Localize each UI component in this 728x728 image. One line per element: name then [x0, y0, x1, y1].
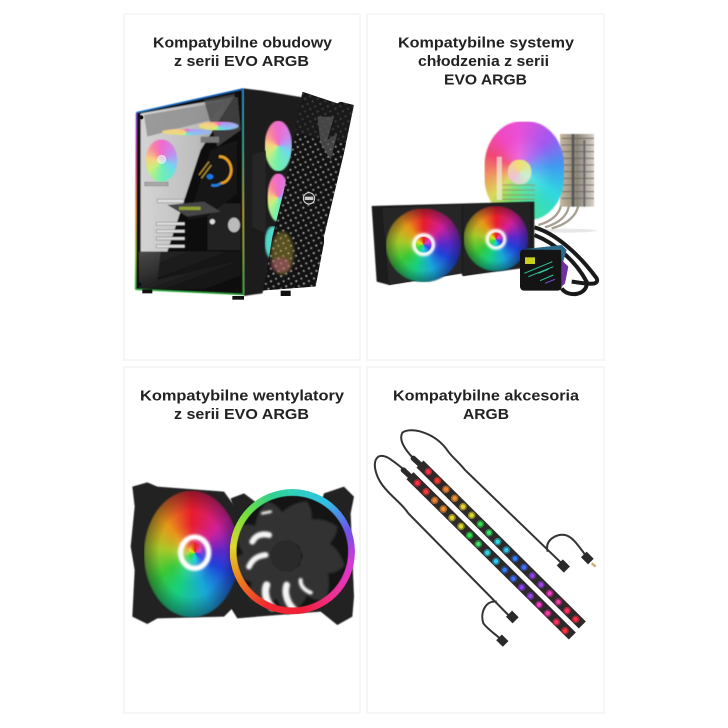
heading: fans: Kompatybilne wentylatory: [140, 388, 345, 404]
front panel logo: [303, 193, 315, 204]
image: tower air cooler and AIO liquid cooler: [372, 121, 597, 294]
right fan blades: [228, 498, 345, 616]
front handle: [252, 151, 266, 234]
heading: cooling systems: EVO ARGB: [444, 72, 527, 88]
RGB edge lighting: [136, 89, 243, 294]
left fan RGB rotor: [144, 491, 239, 617]
removable mesh front panel: [262, 92, 354, 291]
right fan disc: [235, 494, 350, 609]
blade highlights: [249, 512, 311, 609]
radiator: [372, 202, 534, 285]
heading: fans: [140, 388, 345, 423]
left case fan: [146, 139, 177, 182]
tower cooler RGB fan: [484, 121, 564, 220]
panel: fans: [124, 367, 360, 713]
heading: fans: z serii EVO ARGB: [174, 406, 309, 423]
tempered glass panel: [136, 88, 244, 295]
connectors: [496, 552, 594, 647]
fins seen through fan: [497, 157, 535, 200]
front fans: [265, 121, 292, 171]
tower cooler shadow: [533, 229, 597, 233]
radiator fan right: [464, 206, 528, 271]
image: two ARGB LED strips: [375, 430, 596, 647]
heading: accessories: Kompatybilne akcesoria: [393, 388, 580, 404]
heading: cases: Kompatybilne obudowy: [153, 34, 333, 52]
top case fan left: [162, 129, 212, 135]
radiator fan left: [386, 208, 461, 282]
upper strip LEDs: [425, 469, 579, 622]
image: PC case with open mesh front: [136, 88, 354, 300]
heading: accessories: ARGB: [463, 406, 509, 423]
heading: cases: z serii EVO ARGB: [174, 53, 309, 70]
heading: cooling systems: chłodzenia z serii: [418, 53, 549, 70]
cables: [375, 430, 587, 640]
upper strip body: [420, 464, 582, 625]
right fan hub: [270, 541, 301, 571]
connector pins: [592, 563, 596, 567]
heatsink fins: [560, 134, 594, 207]
left fan frame: [131, 482, 237, 624]
heading: cases: [153, 34, 333, 70]
lower strip body: [410, 476, 572, 636]
top case fan right: [198, 121, 239, 131]
heat pipes: [538, 205, 578, 228]
case feet: [142, 289, 291, 300]
fan right hub: [487, 231, 505, 248]
heading: cooling systems: [398, 34, 575, 88]
heading: accessories: [393, 388, 580, 423]
right fan RGB ring: [230, 489, 355, 614]
panel: cases: [124, 14, 360, 360]
image: two ARGB fans: [131, 482, 355, 625]
left fan hub: [181, 537, 209, 568]
tower cooler hub: [508, 159, 532, 185]
strip boots: [403, 458, 422, 478]
pump block: [520, 245, 568, 291]
panel: accessories: [367, 367, 604, 713]
fan hub: [158, 155, 166, 163]
glass screws: [138, 93, 239, 292]
lower strip LEDs: [414, 480, 568, 634]
fan left hub: [414, 235, 433, 254]
heading: cooling systems: Kompatybilne systemy: [398, 34, 575, 52]
right fan frame: [230, 487, 354, 625]
case side body: [243, 88, 302, 296]
liquid tubes: [534, 227, 597, 294]
panel: cooling systems: [367, 14, 604, 360]
